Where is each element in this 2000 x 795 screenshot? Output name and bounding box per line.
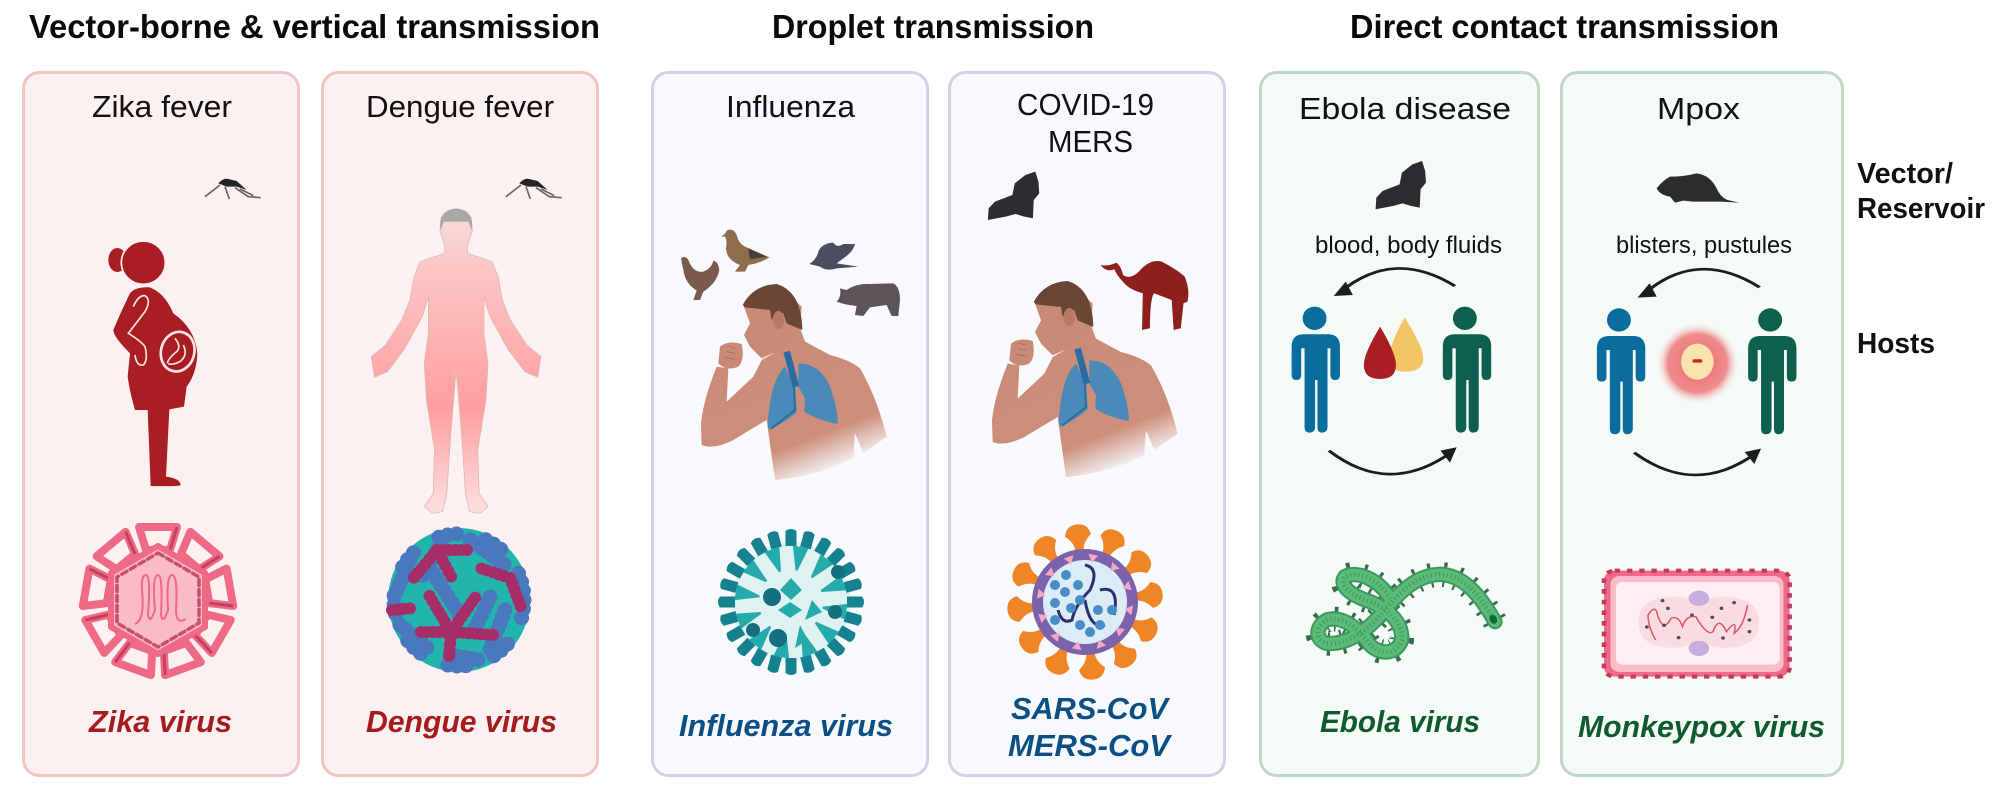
virus name: Dengue virus [366, 704, 557, 739]
heading: Mpox [1657, 91, 1741, 126]
hosts diagram [1597, 269, 1796, 475]
title: direct contact: Direct contact transmission [1350, 8, 1779, 45]
panel: Dengue fever [322, 72, 598, 776]
arrow: bottom [1329, 447, 1457, 474]
icon: bat [1376, 161, 1426, 209]
icon: chicken [681, 257, 719, 300]
panel box [322, 72, 598, 776]
arrow: top [1638, 269, 1760, 298]
title: droplet: Droplet transmission [772, 8, 1094, 45]
panel box [1562, 72, 1842, 776]
arrow: top [1334, 268, 1455, 296]
icon: blue host [1597, 308, 1645, 434]
icon: pregnant woman [108, 241, 199, 486]
icon: Ebola virion [1318, 574, 1499, 652]
label line 2: Reservoir [1857, 193, 1985, 225]
icon: influenza virion [718, 529, 864, 675]
icon: coughing patient [701, 284, 887, 480]
panel: Mpox [1562, 72, 1842, 776]
icon: camel [1101, 261, 1188, 330]
panel box [1260, 72, 1538, 776]
icon: monkeypox virion [1604, 571, 1790, 677]
icon: blue host [1292, 307, 1340, 433]
heading: MERS: MERS [1048, 124, 1133, 159]
hosts diagram [1292, 161, 1491, 474]
icon: mosquito [205, 179, 261, 199]
icon: human body [371, 208, 541, 513]
panel box [950, 72, 1224, 776]
panel: Influenza [652, 72, 928, 776]
bat and camel [988, 172, 1188, 330]
icon: Zika virion [83, 527, 233, 675]
panel box [24, 72, 298, 776]
transmission note: blisters, pustules [1616, 232, 1792, 259]
row label: vector / reservoir [1857, 158, 1985, 225]
icon: duck [721, 230, 769, 272]
icon: coughing patient [992, 281, 1178, 477]
icon: green host [1443, 307, 1491, 433]
icon: rodent [1657, 173, 1739, 203]
row label: hosts: Hosts [1857, 328, 1935, 360]
heading: Dengue fever [366, 89, 554, 124]
panel: Zika fever [24, 72, 298, 776]
title: vector-borne: Vector-borne & vertical transmission [29, 8, 600, 45]
virus name: MERS-CoV: MERS-CoV [1008, 728, 1172, 763]
icon: pustule [1655, 322, 1740, 405]
heading: COVID-19: COVID-19 [1017, 87, 1154, 122]
heading: Ebola disease [1299, 91, 1511, 126]
virus name: Monkeypox virus [1578, 709, 1825, 744]
icon: crow [809, 243, 858, 270]
virus name: SARS-CoV: SARS-CoV [1011, 691, 1170, 726]
animals and coughing patient [681, 230, 900, 480]
panel: COVID-19 and MERS [950, 72, 1224, 776]
icon: Dengue virion [388, 528, 530, 672]
virus name: Influenza virus [679, 708, 893, 743]
icon: mosquito [506, 179, 562, 199]
arrow: bottom [1634, 449, 1761, 475]
panel: Ebola disease [1260, 72, 1538, 776]
heading: Influenza [726, 89, 856, 124]
panel box [652, 72, 928, 776]
virus name: Ebola virus [1320, 704, 1480, 739]
icon: coronavirus virion [1006, 523, 1164, 681]
icon: green host [1748, 308, 1796, 434]
icon: fluid drops [1364, 317, 1423, 379]
heading: Zika fever [92, 89, 232, 124]
virus name: Zika virus [88, 704, 232, 739]
icon: bat [988, 172, 1039, 220]
icon: pig [837, 283, 900, 316]
transmission note: blood, body fluids [1315, 232, 1502, 259]
label line 1: Vector/ [1857, 158, 1953, 190]
